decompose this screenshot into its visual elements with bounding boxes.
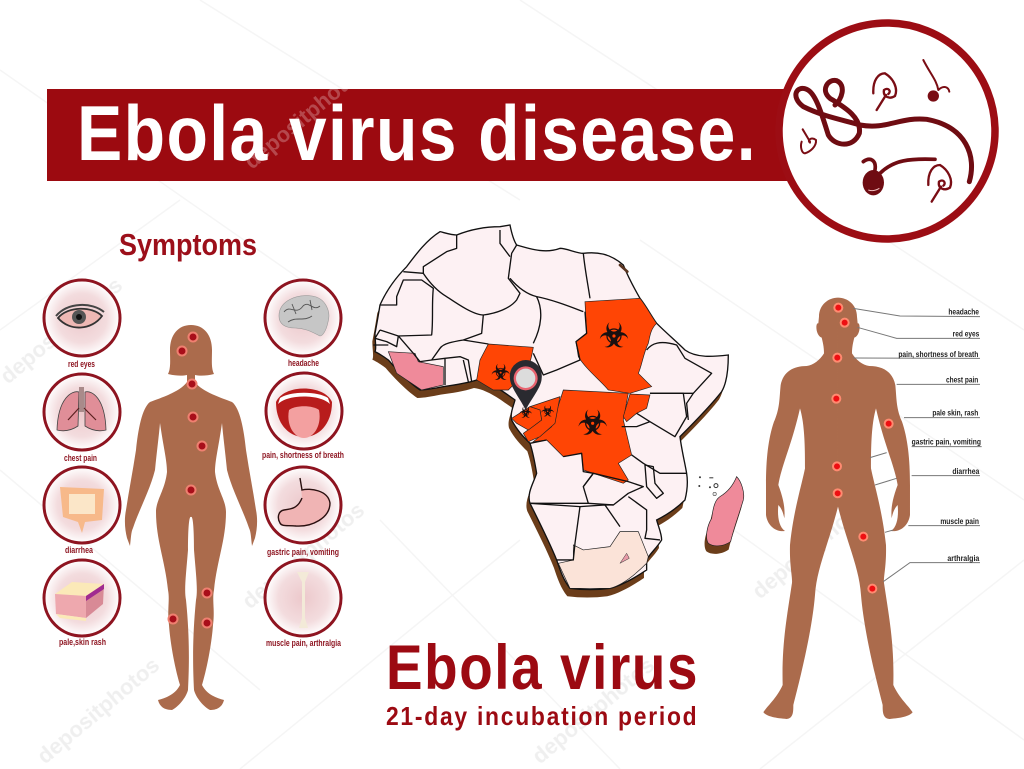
Madagascar shadow [705,485,742,554]
subheading: incubation period: 21-day incubation period [386,703,697,731]
watermark text: depositphotos [527,652,659,769]
callout labels: red eyes [953,330,980,339]
symptom: shortness of breath [262,373,344,460]
pain points [832,304,893,593]
biohazard: Nigeria [491,364,511,381]
Lesotho [620,553,629,563]
label: muscle pain, arthralgia [266,638,342,648]
islands [698,476,718,496]
symptom: chest pain [44,374,120,463]
watermark text: depositphotos [747,487,879,604]
Red Sea coast [620,265,627,272]
map land [375,225,728,590]
biohazard: Central African Republic [541,405,555,417]
watermark text: depositphotos [237,497,369,614]
symptom: red eyes [44,280,120,369]
biohazard: Congo [577,409,608,437]
label: diarrhea [65,545,94,555]
biohazard: Sudan [598,322,630,349]
callout labels: pale skin, rash [932,408,978,417]
callout labels: headache [948,307,979,316]
title: Ebola virus disease. [77,91,756,177]
label: chest pain [64,453,97,463]
map of Africa [372,225,744,598]
virus filaments [796,60,972,202]
map shadow [372,233,726,598]
pain points [168,332,212,628]
leader lines [853,308,982,582]
callout labels: gastric pain, vomiting [912,438,981,447]
callout labels [898,307,981,563]
label: pain, shortness of breath [262,450,344,460]
virus circle [779,23,995,239]
outbreak countries [477,298,657,483]
symptom: diarrhea [44,467,120,555]
title banner [47,57,792,181]
callout labels: pain, shortness of breath [898,350,978,359]
label: red eyes [68,359,95,369]
symptom: pale skin rash [44,560,120,647]
banner watermark: depositphotos [239,57,371,174]
watermark text [0,272,879,769]
watermark text: depositphotos [32,652,164,769]
country borders [373,230,712,560]
West Africa pink countries [388,352,443,390]
symptom: muscle pain [265,560,342,648]
callout labels: chest pain [946,376,978,385]
South Africa [558,532,648,588]
Madagascar [707,477,744,546]
heading: symptoms: Symptoms [119,227,257,262]
map pin [510,360,542,410]
callout labels: arthralgia [947,554,980,563]
label: pale,skin rash [59,637,106,647]
symptom: gastric pain [265,467,341,557]
male body [763,298,982,719]
callout labels: diarrhea [952,467,980,476]
label: headache [288,358,319,368]
heading: Ebola virus: Ebola virus [386,632,697,703]
label: gastric pain, vomiting [267,547,339,557]
callout labels: muscle pain [940,517,979,526]
symptom: headache [265,280,341,368]
female body [125,325,257,710]
biohazard: Cameroon [519,407,533,419]
